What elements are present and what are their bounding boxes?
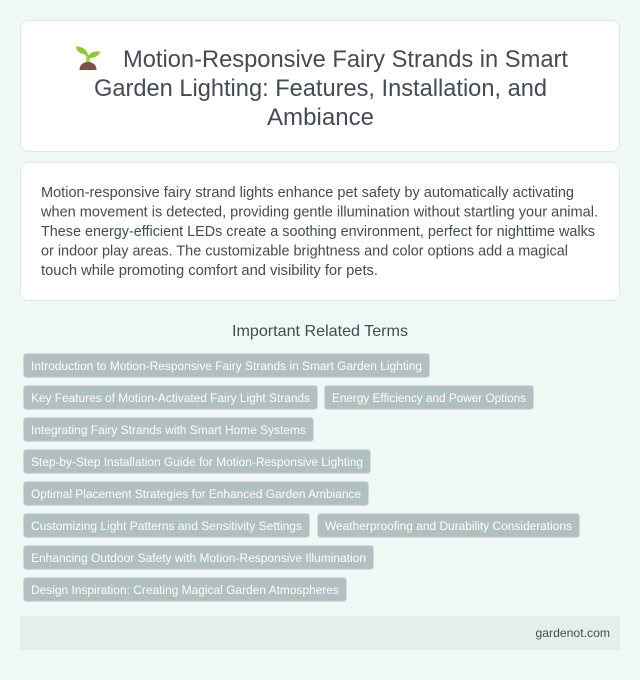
description text: touch while promoting comfort and visibility for pets. xyxy=(41,263,378,279)
title text: Garden Lighting: Features, Installation, and xyxy=(94,75,547,102)
title text: Motion-Responsive Fairy Strands in Smart xyxy=(123,46,568,73)
tag: outdoor safety: Enhancing Outdoor Safety with Motion-Responsive Illumination xyxy=(31,551,366,565)
panel: title xyxy=(20,20,620,152)
tag: weatherproofing xyxy=(318,514,580,538)
tag: introduction xyxy=(24,354,430,378)
description text: These energy-efficient LEDs create a soothing environment, perfect for nighttime walks xyxy=(41,224,595,240)
description text xyxy=(40,185,598,279)
title text xyxy=(94,46,568,131)
tag: customizing: Customizing Light Patterns and Sensitivity Settings xyxy=(31,519,302,533)
tag: smart home: Integrating Fairy Strands with Smart Home Systems xyxy=(31,423,306,437)
title text: Ambiance xyxy=(267,104,374,131)
tag: installation guide xyxy=(24,450,370,474)
tag: placement: Optimal Placement Strategies for Enhanced Garden Ambiance xyxy=(31,487,361,501)
description text: Motion-responsive fairy strand lights enhance pet safety by automatically activating xyxy=(41,185,574,201)
footer xyxy=(20,616,620,650)
description text: or indoor play areas. The customizable brightness and color options add a magical xyxy=(41,244,568,260)
tag: design inspiration xyxy=(24,578,346,602)
tag: key features xyxy=(24,386,318,410)
panel: description xyxy=(20,162,620,300)
tag: outdoor safety xyxy=(24,546,374,570)
heading: related terms: Important Related Terms xyxy=(232,323,408,340)
tag: energy efficiency xyxy=(324,386,534,410)
tag list xyxy=(24,354,580,602)
icon: sprout xyxy=(76,46,100,70)
description text: when movement is detected, providing gentle illumination without startling your animal. xyxy=(40,204,598,220)
tag: energy efficiency: Energy Efficiency and Power Options xyxy=(332,391,526,405)
tag: key features: Key Features of Motion-Activated Fairy Light Strands xyxy=(31,391,310,405)
tag: installation guide: Step-by-Step Installation Guide for Motion-Responsive Lighting xyxy=(31,455,363,469)
tag: smart home xyxy=(24,418,314,442)
tag: customizing xyxy=(24,514,310,538)
tag: design inspiration: Design Inspiration: Creating Magical Garden Atmospheres xyxy=(31,583,339,597)
footer text: gardenot.com xyxy=(536,626,610,640)
tag: introduction: Introduction to Motion-Responsive Fairy Strands in Smart Garden Lighting xyxy=(31,359,422,373)
tag: weatherproofing: Weatherproofing and Durability Considerations xyxy=(325,519,572,533)
tag: placement xyxy=(24,482,368,506)
